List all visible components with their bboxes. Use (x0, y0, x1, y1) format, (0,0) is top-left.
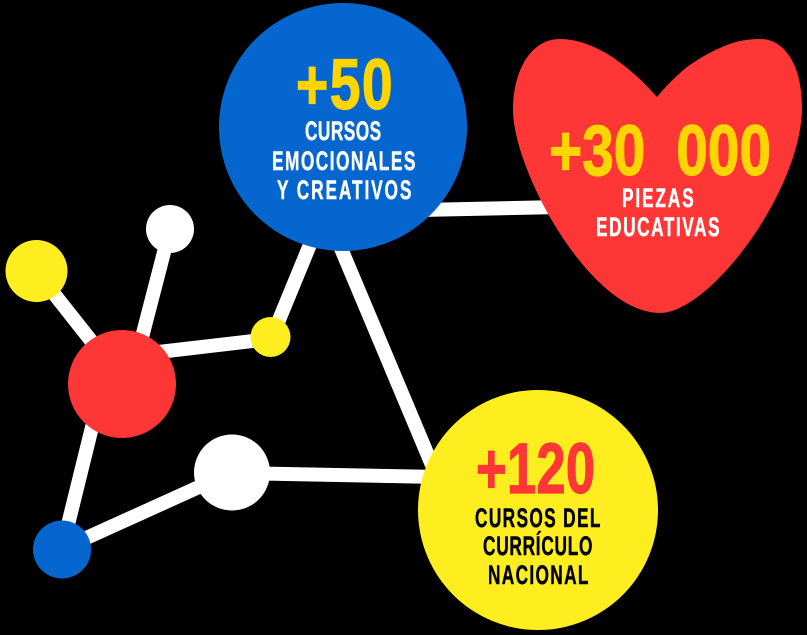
number: +30 000: 000 (676, 111, 771, 190)
label: national curriculum courses: NACIONAL (488, 559, 589, 590)
number: +120: +120 (476, 429, 595, 509)
panel: +50 courses (219, 3, 467, 251)
node: blue circle (33, 520, 91, 578)
label: educational pieces (596, 182, 720, 242)
label: emotional and creative courses: Y CREATIVOS (277, 174, 411, 205)
connector lines network (36, 207, 560, 549)
number: +50: +50 (296, 45, 393, 125)
number: +30 000: +30 (549, 111, 645, 190)
node: white circle (194, 434, 270, 510)
panel: +120 courses (418, 390, 658, 630)
label: educational pieces: EDUCATIVAS (596, 211, 720, 242)
label: emotional and creative courses: EMOCIONALES (272, 145, 415, 176)
label: national curriculum courses: CURRÍCULO (483, 530, 592, 561)
node: small yellow circle (250, 317, 290, 357)
label: national curriculum courses (475, 502, 601, 590)
node: red circle (68, 330, 176, 438)
node: yellow circle (6, 240, 68, 302)
label: emotional and creative courses: CURSOS (305, 115, 381, 146)
label: educational pieces: PIEZAS (622, 182, 694, 213)
panel: +30 000 heart (513, 39, 802, 313)
node: small white circle (146, 205, 194, 253)
label: emotional and creative courses (272, 115, 415, 205)
label: national curriculum courses: CURSOS DEL (475, 502, 601, 533)
